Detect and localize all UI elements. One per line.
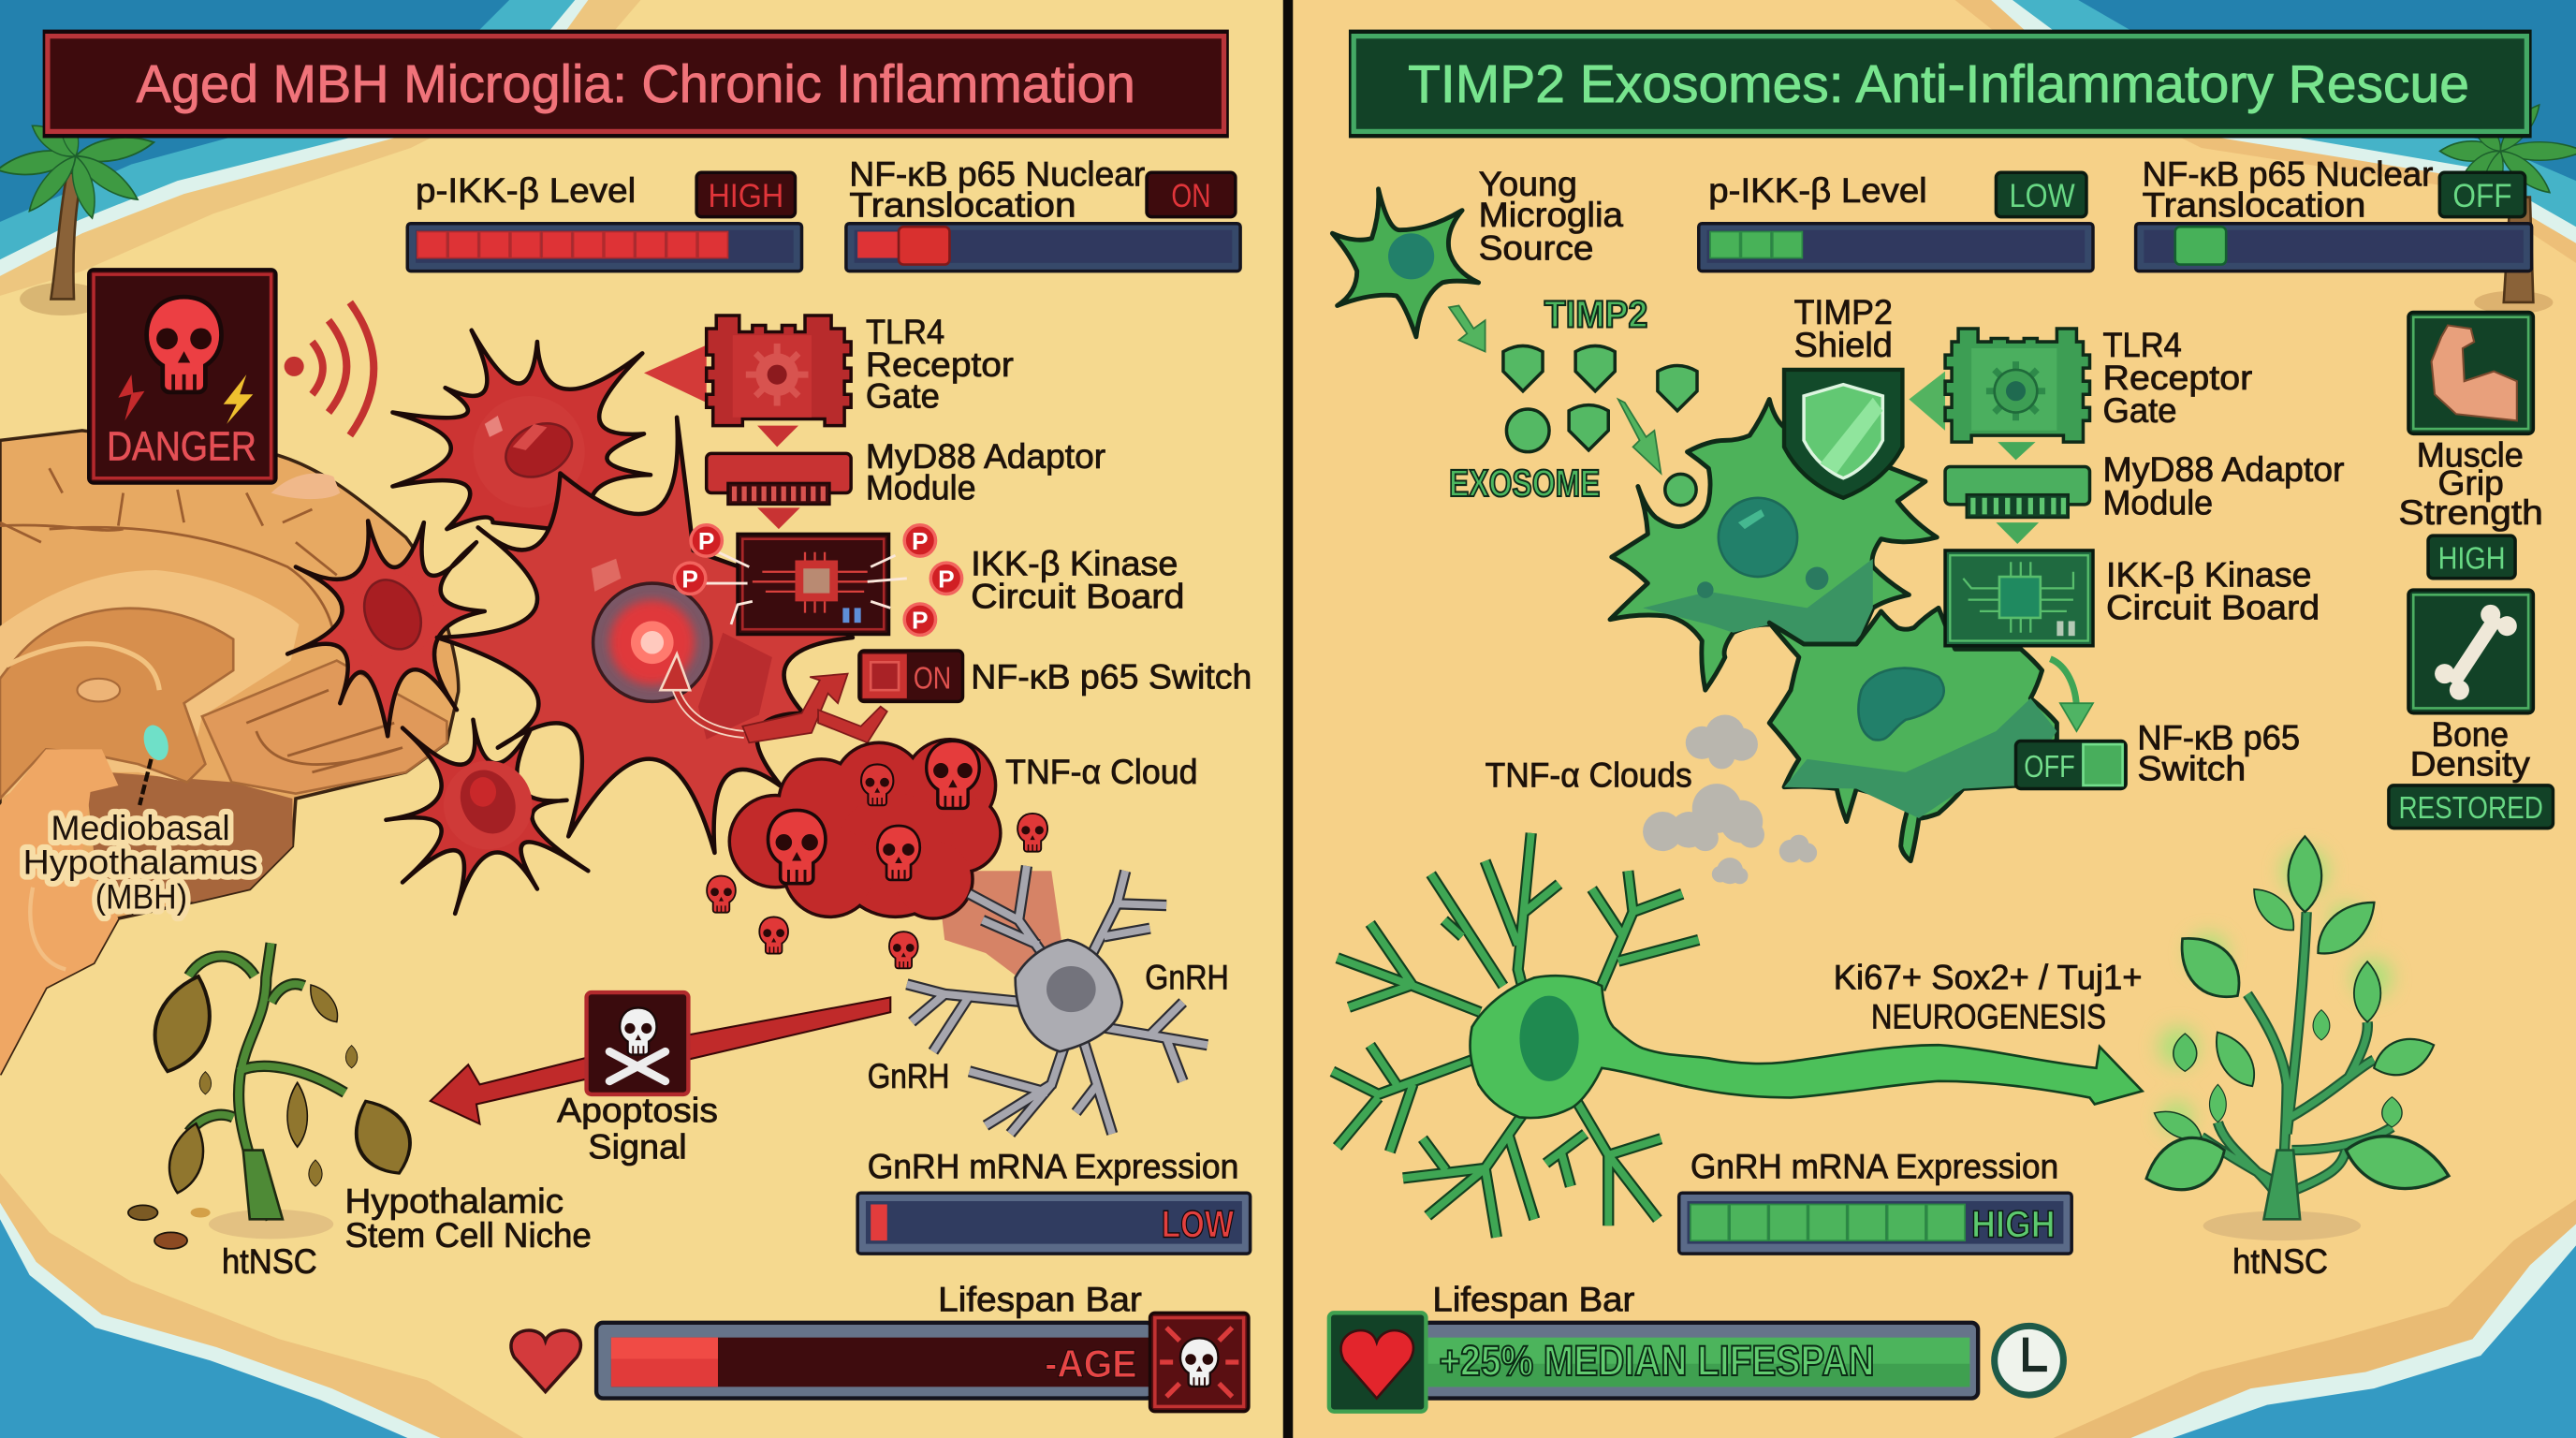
label: neurogenesis markers <box>1834 959 2143 1036</box>
cell: central activated microglia with nucleus <box>437 418 853 853</box>
hud: right NF-κB nuclear translocation: Translocation <box>2143 186 2365 225</box>
plant: thriving htNSC plant <box>2138 836 2454 1240</box>
hud: left GnRH mRNA expression: GnRH mRNA Expression <box>868 1147 1238 1185</box>
icon: IKK-β kinase circuit board <box>698 534 907 634</box>
brain cross-section illustration <box>0 431 459 1075</box>
cloud: TNF-α cloud with skulls <box>707 738 1061 977</box>
arrow: curved arrow to OFF switch <box>2050 659 2093 731</box>
label: MyD88 adaptor module: Module <box>866 469 976 507</box>
icons: phosphate P markers: P <box>912 527 929 555</box>
label: TLR4 receptor gate: Gate <box>866 376 940 415</box>
label: muscle grip strength: Muscle <box>2417 435 2524 474</box>
hud: left lifespan bar: Lifespan Bar <box>938 1281 1142 1319</box>
hud: right lifespan bar: Lifespan Bar <box>1432 1281 1634 1319</box>
label: green IKK-β circuit board: IKK-β Kinase <box>2106 556 2311 594</box>
label: young microglia source: Source <box>1479 228 1593 267</box>
icons: phosphate P markers: P <box>912 606 929 634</box>
cell: rescued microglia lower <box>1769 608 2056 861</box>
ocean: top left <box>0 0 640 296</box>
label: green IKK-β circuit board <box>2106 556 2320 627</box>
label: bone density: Bone <box>2432 715 2509 754</box>
hud: right lifespan bar: +25% MEDIAN LIFESPAN <box>1439 1337 1875 1385</box>
label: TIMP2 shield: Shield <box>1794 326 1893 364</box>
neuron: damaged grey GnRH neuron <box>907 866 1208 1134</box>
label: EXOSOME outlined tag: EXOSOME <box>1449 462 1600 505</box>
cell: rescued microglia upper <box>1610 399 1937 690</box>
icons: phosphate P markers: P <box>698 527 714 555</box>
icon: MyD88 adaptor module <box>707 453 851 529</box>
icon: NF-κB ON switch: ON <box>914 661 951 696</box>
hud: right GnRH mRNA expression <box>1679 1147 2071 1254</box>
label: neurogenesis markers: Ki67+ Sox2+ / Tuj1+ <box>1834 959 2143 997</box>
arrow: apoptosis signal <box>431 997 890 1123</box>
icon: OFF switch <box>2016 741 2126 788</box>
label: green MyD88 adaptor module <box>2103 450 2345 521</box>
hud: right p-IKK-β level <box>1699 171 2093 271</box>
icon: NF-κB ON switch <box>859 651 962 701</box>
hud: left NF-κB nuclear translocation: ON <box>1171 178 1211 214</box>
icon: green TLR4 receptor gate <box>1909 329 2089 460</box>
icon: right palm tree <box>2440 99 2576 314</box>
cell: activated microglia bottom <box>386 720 588 914</box>
hud: right p-IKK-β level: LOW <box>2009 178 2075 214</box>
label: NF-κB p65 switch: NF-κB p65 Switch <box>971 657 1251 696</box>
label: TLR4 receptor gate: TLR4 <box>866 313 944 351</box>
hud: left lifespan bar <box>511 1281 1249 1412</box>
label: TIMP2 shield: TIMP2 <box>1794 293 1893 331</box>
ocean: bottom right <box>2050 1199 2576 1438</box>
hud: right p-IKK-β level: p-IKK-β Level <box>1708 171 1927 210</box>
label: green TLR4 receptor gate: Receptor <box>2103 359 2252 397</box>
label: TIMP2 shield <box>1794 293 1893 364</box>
label: bone density: Density <box>2410 744 2530 783</box>
icon: TIMP2 shield <box>1784 370 1902 498</box>
label: muscle grip strength <box>2398 435 2543 532</box>
heading: left title banner: Aged MBH Microglia: Chronic Inflammation <box>137 54 1135 113</box>
label: TIMP2 outlined tag: TIMP2 <box>1544 292 1647 335</box>
label: apoptosis signal: Signal <box>588 1127 687 1166</box>
label: TNF-α cloud: TNF-α Cloud <box>1005 753 1197 791</box>
labels: GnRH: GnRH <box>868 1057 949 1095</box>
label: muscle grip strength: Grip <box>2438 463 2504 502</box>
label: bone density <box>2410 715 2530 783</box>
label: IKK-β kinase circuit board: Circuit Board <box>971 577 1184 615</box>
arrows: NF-κB output arrows <box>742 674 887 742</box>
hud: left GnRH mRNA expression <box>857 1147 1251 1254</box>
hud: right NF-κB nuclear translocation: NF-κB p65 Nuclear <box>2143 154 2433 193</box>
icon: TLR4 receptor gate <box>644 315 851 447</box>
label: TNF-α clouds: TNF-α Clouds <box>1486 756 1692 795</box>
badge: muscle HIGH: HIGH <box>2438 541 2506 576</box>
hud: left lifespan bar: -AGE <box>1045 1342 1137 1386</box>
badge: bone RESTORED <box>2389 785 2553 829</box>
icon: green MyD88 adaptor module <box>1945 466 2089 544</box>
icon: apoptosis skull and crossbones <box>587 992 688 1094</box>
hud: right NF-κB nuclear translocation <box>2136 154 2532 271</box>
label: apoptosis signal <box>557 1092 718 1166</box>
label: Mediobasal Hypothalamus (MBH): Hypothalamus <box>23 844 258 882</box>
labels: GnRH <box>868 959 1229 1095</box>
labels: hypothalamic stem cell niche and htNSC <box>222 1181 592 1281</box>
hud: left NF-κB nuclear translocation: Translocation <box>849 186 1076 225</box>
label: IKK-β kinase circuit board <box>971 544 1184 615</box>
label: NF-κB p65 switch: NF-κB p65 <box>2137 718 2300 756</box>
cell: activated microglia top <box>392 330 651 534</box>
label: apoptosis signal: Apoptosis <box>557 1092 718 1130</box>
label: green TLR4 receptor gate <box>2103 326 2252 430</box>
labels: hypothalamic stem cell niche and htNSC: Stem Cell Niche <box>345 1216 592 1255</box>
label: htNSC: htNSC <box>2232 1242 2328 1281</box>
icon: OFF switch: OFF <box>2024 750 2075 785</box>
icon: danger sign: DANGER <box>107 423 256 469</box>
icons: phosphate P markers <box>674 525 962 635</box>
label: young microglia source: Young <box>1479 165 1577 203</box>
clouds: dissipating grey TNF-α <box>1643 714 1817 884</box>
ocean: top right <box>1955 0 2576 263</box>
icons: phosphate P markers: P <box>681 565 698 593</box>
labels: hypothalamic stem cell niche and htNSC: Hypothalamic <box>345 1181 564 1220</box>
heading: right title banner: TIMP2 Exosomes: Anti-Inflammatory Rescue <box>1408 54 2469 113</box>
hud: right GnRH mRNA expression: HIGH <box>1971 1203 2056 1246</box>
arrows: exosome delivery <box>1449 305 1661 473</box>
cell: activated microglia left <box>287 521 485 736</box>
label: young microglia source: Microglia <box>1479 196 1624 234</box>
label: Mediobasal Hypothalamus (MBH): Mediobasal <box>51 809 230 847</box>
hud: left p-IKK-β level: p-IKK-β Level <box>416 171 636 210</box>
label: neurogenesis markers: NEUROGENESIS <box>1871 998 2106 1036</box>
heading: right title banner <box>1349 30 2532 138</box>
icon: danger sign <box>89 270 276 483</box>
label: NF-κB p65 switch: Switch <box>2137 750 2246 788</box>
icons: TIMP2 exosome shields <box>1503 345 1697 506</box>
icon: danger signal waves <box>285 302 373 435</box>
bone density panel <box>2408 590 2533 713</box>
badge: bone RESTORED: RESTORED <box>2398 791 2543 826</box>
label: green MyD88 adaptor module: Module <box>2103 483 2213 521</box>
hud: left p-IKK-β level: HIGH <box>708 178 783 214</box>
label: MyD88 adaptor module <box>866 437 1105 507</box>
label: NF-κB p65 switch <box>2137 718 2300 788</box>
label: green MyD88 adaptor module: MyD88 Adaptor <box>2103 450 2345 489</box>
label: TLR4 receptor gate: Receptor <box>866 345 1014 384</box>
hud: left p-IKK-β level <box>407 171 801 271</box>
labels: hypothalamic stem cell niche and htNSC: htNSC <box>222 1242 317 1281</box>
label: Mediobasal Hypothalamus (MBH): (MBH) <box>95 878 187 917</box>
hud: right NF-κB nuclear translocation: OFF <box>2452 178 2512 214</box>
hud: left NF-κB nuclear translocation: NF-κB p65 Nuclear <box>849 154 1145 193</box>
icons: phosphate P markers: P <box>938 565 955 593</box>
panel: divider <box>1283 0 1293 1438</box>
label: Mediobasal Hypothalamus (MBH) <box>23 809 258 917</box>
label: young microglia source <box>1479 165 1624 267</box>
label: IKK-β kinase circuit board: IKK-β Kinase <box>971 544 1178 582</box>
label: muscle grip strength: Strength <box>2398 493 2543 532</box>
hud: right GnRH mRNA expression: GnRH mRNA Expression <box>1690 1147 2058 1185</box>
icon: green IKK-β circuit board <box>1945 550 2093 646</box>
icon: left palm tree <box>0 107 155 315</box>
heading: left title banner <box>43 30 1229 138</box>
labels: GnRH: GnRH <box>1145 959 1229 997</box>
hud: right lifespan bar <box>1329 1281 2063 1412</box>
hud: left GnRH mRNA expression: LOW <box>1162 1203 1235 1246</box>
label: green TLR4 receptor gate: TLR4 <box>2103 326 2182 364</box>
label: TLR4 receptor gate <box>866 313 1014 415</box>
plant: wilted htNSC plant <box>128 943 422 1249</box>
muscle grip panel <box>2408 312 2533 433</box>
ocean: bottom left <box>0 1173 526 1438</box>
label: green IKK-β circuit board: Circuit Board <box>2106 589 2320 627</box>
label: MyD88 adaptor module: MyD88 Adaptor <box>866 437 1105 476</box>
label: green TLR4 receptor gate: Gate <box>2103 391 2177 430</box>
cell: young microglia source <box>1332 189 1479 337</box>
hud: left NF-κB nuclear translocation <box>846 154 1240 271</box>
neuron: healthy green GnRH neuron <box>1332 833 2143 1238</box>
